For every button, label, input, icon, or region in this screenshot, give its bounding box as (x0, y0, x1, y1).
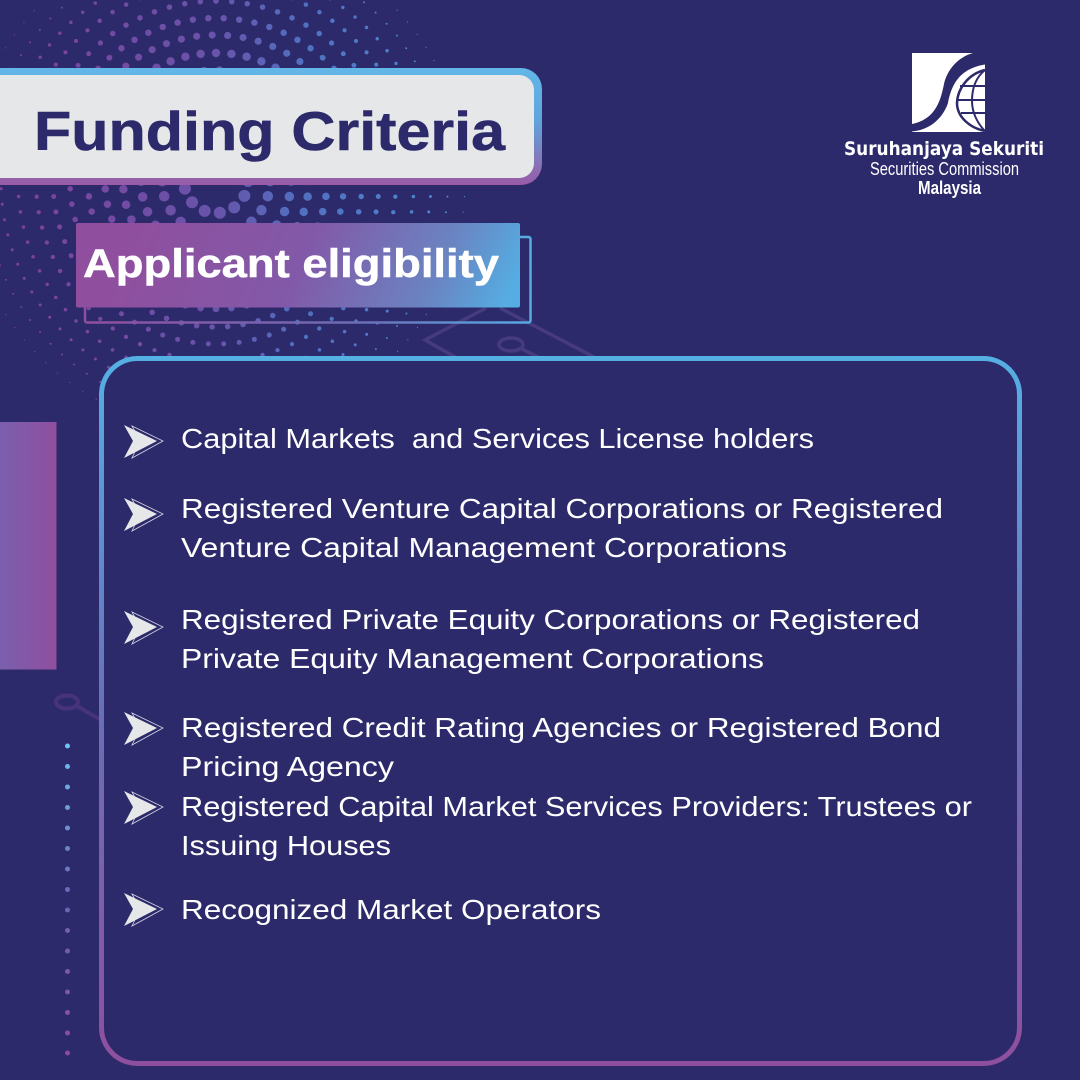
title: Funding Criteria (34, 100, 505, 162)
list item 3 (124, 604, 920, 674)
subtitle banner (76, 223, 530, 322)
list item 4 (124, 712, 941, 782)
subtitle: Applicant eligibility (83, 242, 500, 286)
vertical dotted line (65, 744, 70, 1056)
list item 4: Registered Credit Rating Agencies or Registered Bond (181, 712, 941, 743)
list item 5 (124, 791, 972, 861)
decorative circuit line: top (425, 308, 596, 358)
logo: Securities Commission Malaysia: Securities Commission (870, 159, 1019, 179)
list item 3: Private Equity Management Corporations (181, 643, 764, 674)
logo: Securities Commission Malaysia: Malaysia (918, 178, 982, 198)
left accent bar (0, 422, 56, 670)
decorative circuit node: left (56, 696, 101, 720)
list item 2 (124, 493, 943, 563)
logo: Securities Commission Malaysia (844, 53, 1044, 198)
logo: Securities Commission Malaysia: Suruhanjaya Sekuriti (844, 138, 1044, 160)
list item 2: Registered Venture Capital Corporations or Registered (181, 493, 943, 524)
list item 1: Capital Markets and Services License holders (181, 423, 814, 454)
list item 4: Pricing Agency (181, 751, 394, 782)
list item 6: Recognized Market Operators (181, 894, 601, 925)
icon: logo mark with S curve and globe (912, 53, 985, 132)
halftone dot pattern (0, 0, 465, 430)
list item 5: Registered Capital Market Services Providers: Trustees or (181, 791, 972, 822)
title banner (0, 68, 542, 185)
list item 3: Registered Private Equity Corporations or Registered (181, 604, 920, 635)
list item 5: Issuing Houses (181, 830, 391, 861)
panel: applicant eligibility list (102, 358, 1020, 1064)
list item 2: Venture Capital Management Corporations (181, 532, 787, 563)
